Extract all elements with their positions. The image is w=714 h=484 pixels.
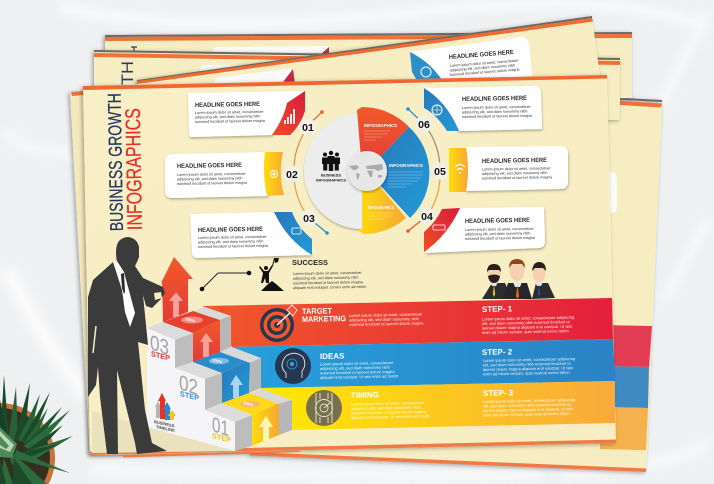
icon: three businessmen [482,259,555,299]
icon: red wedge [424,208,460,252]
step 1 block: 100% [243,400,254,408]
band: target marketing, step 1: elit, sed diam nonummy nibh euismod tincidunt ut [482,319,570,326]
card 06: euismod tincidunt ut laoreet dolore magna [462,114,533,119]
step numbers: 02 [286,169,298,181]
shadow [92,411,235,453]
center label: BUSINESS [321,172,341,178]
card 04 [424,207,545,253]
success block: euismod tincidunt ut laoreet dolore magna [293,280,364,285]
big red arrow [160,257,193,322]
success block: adipiscing elit, sed diam nonummy nibh [293,276,358,281]
step numbers: 06 [418,119,430,131]
icon: blue wedge with globe [424,88,459,131]
card 05: adipiscing elit, sed diam nonummy nibh [482,171,547,176]
band: ideas, step 2: laoreet dolore magna aliquam erat volutpat. Ut wisi [483,365,573,372]
icon: business timeline arrows [154,393,176,433]
card 05: Lorem ipsum dolor sit amet, consectetuer [482,166,552,171]
band: target marketing, step 1: Lorem ipsum dolor sit amet, consectetuer [349,311,423,318]
band: target marketing, step 1 [203,298,613,347]
card 03 [190,212,312,258]
band: timing, step 3: elit, sed diam nonummy nibh euismod tincidunt ut [483,402,571,408]
success block: Lorem ipsum dolor sit amet, consectetuer [293,271,363,276]
central pie chart [304,107,429,234]
step 3 block: 100% [185,316,196,324]
step numbers: 03 [303,213,315,225]
icon: world map [347,151,387,191]
icon: red wedge with bars [272,91,305,135]
band: ideas, step 2 [232,339,615,388]
step 2 block: 100% [212,357,223,365]
step numbers: 01 [302,122,314,134]
band: target marketing, step 1: Lorem ipsum dolor sit amet, consectetuer adipiscing [482,315,574,321]
icon: head [275,348,311,384]
step 2 block: STEP [180,389,199,403]
rear sheet: second [105,32,632,110]
step 2 block [175,347,261,410]
card 02: euismod tincidunt ut laoreet dolore magna [177,181,248,186]
success block: SUCCESS [292,260,328,267]
band: timing, step 3: STEP- 3 [483,388,514,398]
card 02 [165,152,284,198]
rear title fragment: TH [118,61,137,85]
band: ideas, step 2: euismod tincidunt ut laoreet dolore magna [320,369,395,375]
segment labels: INFOGRAPHICS [389,163,423,168]
band: ideas, step 2: STEP- 2 [482,347,513,357]
band: timing, step 3: TIMING [351,390,379,400]
isometric staircase [92,257,292,453]
band: ideas, step 2: elit, sed diam nonummy nibh euismod tincidunt ut [483,361,571,367]
grey half circle [304,113,362,229]
step 1 block: 01 [212,412,229,441]
businessman silhouette [88,237,167,454]
card 06: HEADLINE GOES HERE [462,95,527,103]
card 04: HEADLINE GOES HERE [465,217,530,225]
icon: watch [306,390,342,426]
title: BUSINESS GROWTH [104,93,127,231]
card 05: euismod tincidunt ut laoreet dolore magna [482,175,553,180]
segment labels: INFOGRAPHICS [368,205,394,210]
sleeve gap [93,326,96,353]
rear card [200,65,250,80]
success block: aliquam erat volutpat. Ut wisi enim ad minim [293,285,366,290]
icon: business timeline arrows: BUSINESS [154,419,175,428]
card 02: Lorem ipsum dolor sit amet, consectetuer [177,172,247,177]
band: timing, step 3: adipiscing elit, sed diam nonummy nibh [351,405,421,411]
card 04: adipiscing elit, sed diam nonummy nibh [465,231,530,236]
icon: yellow tab with gear [264,152,284,196]
step 3 block: 03 [150,330,169,360]
icon: target [260,305,297,342]
rear sheet: third [94,50,620,120]
segment labels: INFOGRAPHICS [364,123,397,128]
card 03: euismod tincidunt ut laoreet dolore magna [198,244,269,249]
red segment [357,107,409,171]
connector line [200,271,251,291]
band: ideas, step 2: enim ad minim veniam, quis nostrud exerci tation [483,370,570,376]
center label: INFOGRAPHICS [316,178,346,182]
band: target marketing, step 1: euismod tincidunt ut laoreet dolore magna [349,320,424,327]
step 1 block: STEP [212,431,231,445]
band: ideas, step 2: adipiscing elit, sed diam nonummy nibh [320,365,390,371]
rear sheet: far right [70,91,662,472]
step numbers: 05 [434,166,446,178]
band: target marketing, step 1: adipiscing elit, sed diam nonummy nibh [349,316,419,322]
rear card right: Lorem ipsum dolor sit amet, consectetuer [450,59,519,68]
band: target marketing, step 1: laoreet dolore magna aliquam erat volutpat. Ut wisi [482,324,572,330]
rear card right: adipiscing elit, sed diam nonummy nibh [450,63,515,72]
card 02: HEADLINE GOES HERE [177,162,242,170]
icon: blue wedge [274,212,312,255]
card 01: adipiscing elit, sed diam nonummy nibh [195,114,260,119]
card 03: HEADLINE GOES HERE [198,226,263,234]
step 3 block: STEP [151,349,170,363]
success block [200,258,366,291]
card 04: Lorem ipsum dolor sit amet, consectetuer [465,227,535,232]
rear card right: HEADLINE GOES HERE [449,49,514,61]
band: ideas, step 2: Lorem ipsum dolor sit amet, consectetuer [320,360,394,366]
band: timing, step 3: Lorem ipsum dolor sit amet, consectetuer adipiscing [483,397,575,404]
card 06: Lorem ipsum dolor sit amet, consectetuer [462,105,532,110]
band: target marketing, step 1: TARGET [302,306,332,316]
card 01 [188,91,305,137]
band: timing, step 3: Lorem ipsum dolor sit amet, consectetuer [351,400,425,406]
step 3 block [147,307,235,451]
icon: yellow tab with wifi [449,148,468,192]
card 05: HEADLINE GOES HERE [482,157,547,165]
step 1 block [205,389,292,451]
yellow segment [358,171,406,234]
card 06 [424,86,542,131]
band: timing, step 3: euismod tincidunt ut laoreet dolore magna [351,409,426,415]
main sheet [83,75,616,458]
center label [316,172,346,182]
rear card right [410,37,532,82]
card 04: euismod tincidunt ut laoreet dolore magna [465,236,536,241]
title [104,93,147,231]
card 06: adipiscing elit, sed diam nonummy nibh [462,109,527,114]
step numbers: 04 [421,211,433,223]
blue segment [367,127,429,218]
card 05 [449,146,568,192]
band: target marketing, step 1: MARKETING [302,314,346,324]
shirt and tie [113,261,135,327]
rear card left [215,68,295,84]
title: INFOGRAPHICS [122,108,147,230]
icon: person with flag on summit [259,258,284,291]
step 2 block: 02 [179,370,198,400]
step numbers [284,116,448,226]
band: target marketing, step 1: enim ad minim veniam, quis nostrud exerci tation [482,328,569,335]
icon: business timeline arrows: TIMELINE [156,424,175,433]
rear card fragment [596,172,617,213]
rear sheet: rotated [137,16,600,100]
icon: business people [322,151,340,171]
card 01: HEADLINE GOES HERE [195,101,260,109]
rear band colours [600,325,652,450]
rear card right: euismod tincidunt ut laoreet dolore magna [450,67,521,77]
segment labels [364,123,423,219]
rear card [212,46,329,56]
band: timing, step 3 [261,381,615,430]
band: timing, step 3: aliquam erat volutpat. Ut wisi enim ad minim [351,413,430,420]
card 02: adipiscing elit, sed diam nonummy nibh [177,176,242,181]
card 01: Lorem ipsum dolor sit amet, consectetuer [195,110,265,115]
card 03: Lorem ipsum dolor sit amet, consectetuer [198,235,268,240]
band: ideas, step 2: Lorem ipsum dolor sit amet, consectetuer adipiscing [483,356,575,363]
icon: potted plant [0,375,73,484]
card 01: euismod tincidunt ut laoreet dolore magna [195,119,266,124]
band: timing, step 3: laoreet dolore magna aliquam erat volutpat. Ut wisi [483,406,573,413]
connector ring [294,107,440,235]
card 03: adipiscing elit, sed diam nonummy nibh [198,239,263,244]
band: ideas, step 2: aliquam erat volutpat. Ut wisi enim ad minim [320,373,399,380]
rear title fragment [131,47,137,52]
band: ideas, step 2: IDEAS [320,351,345,361]
shirt cuff [154,292,162,300]
band: timing, step 3: enim ad minim veniam, quis nostrud exerci tation [483,411,570,417]
band: target marketing, step 1: STEP- 1 [482,304,513,314]
